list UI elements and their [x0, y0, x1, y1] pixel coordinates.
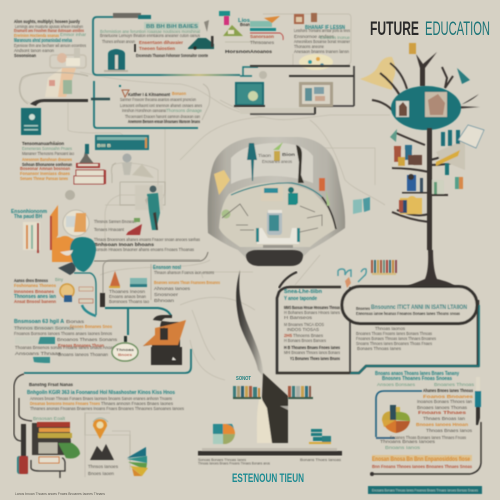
text: left middle block: Mananer Thenosns Panoant iao: [22, 151, 74, 156]
text: lower left main block: Amnoes bnoan Thnoas Fonaes Bnaes Iaonses bnoans Sanon enanes anhosn Tnoans: [30, 396, 173, 401]
shelf bars: [250, 66, 354, 106]
panel: upper-right card of lower left: Boanoes sonans Thoan Fnansoes Bnoanos: [154, 280, 220, 285]
label: SONOT: [236, 376, 251, 382]
panel: upper-right card of lower left: Snosnoer: [154, 292, 179, 297]
text: left middle block: Eeneneras Sonnoahn Pnaes: [22, 146, 73, 151]
text: pie block heading: Bnosnes Thoanes Fnoas Snoeas: [382, 376, 452, 382]
icon: small lamp: [134, 44, 136, 52]
text: left lower block: [14, 277, 64, 304]
panel: central right text panel: MHI Bnoanes Thnoes Ianos Bonaes: [284, 350, 341, 355]
text: left middle block: Senaes Thnear Pansas Ianes: [20, 176, 68, 181]
base caption: [198, 458, 341, 466]
panel: central right text panel: H B Thoanes Bnaes Fnoes Ianes: [284, 345, 340, 350]
icon: circular emblem: [112, 336, 138, 361]
trunk: [427, 128, 432, 250]
panel: central right text panel: H Banseos: [284, 315, 313, 320]
panel heading: Snea-Lhe-tiibn: [284, 289, 322, 295]
base bar: [198, 448, 342, 456]
text: left band block: Bnsmsoan 63 hgil A: [14, 319, 64, 325]
head base ellipse: [246, 250, 303, 266]
text: left middle block: Boseonar Amnan bosnoan: [20, 166, 70, 171]
crown: [391, 86, 461, 130]
panel: pie chart frame: Thnoas Bnaes Ianos: [426, 428, 473, 433]
panel: central right text panel: 2H5: [284, 333, 293, 338]
text: top middle text blocks: Anoanos: [250, 49, 272, 54]
base caption: Sonoas Bonaes Thnoas Ianes: [198, 458, 246, 462]
panel: text card top: Ensnornoe andaes: [294, 34, 335, 39]
panel: pie chart frame: Bnoans Ianos: [385, 445, 421, 450]
icon: oval badge: [299, 54, 333, 70]
panel: second centre text panel: Katther I & Kitoamoant: [128, 92, 170, 97]
text: left lower block: Foshonanea Thoneos: [14, 283, 57, 288]
text: left lower block: Ansat Bnsosl banenn: [14, 299, 56, 304]
text: top centre panel: Tneoen faiostien: [139, 46, 175, 51]
panel: top left text block: Sosonsioan: [14, 53, 36, 58]
tree branches: [392, 133, 458, 222]
icon: scissors and pencils: [338, 260, 397, 288]
panel: pie chart frame: Fnoans Thnaes: [418, 410, 467, 415]
text: left lower block: Biny: [55, 277, 64, 282]
teal scene: [261, 186, 283, 201]
text: centre-left below figure: Bnhsoan Inoan bhoans: [94, 242, 155, 247]
panel: upper-right card of lower left: Ensnson nosl: [153, 265, 182, 271]
icon: seated figure sketch: [112, 154, 165, 210]
text: lower left main block: Bnhgoiln KGIR 363 ia Foonansd Hol Nlsashostwr Kinos Kiss Hnos: [27, 390, 175, 396]
panel: text card top: BHANAF IF LESSN: [305, 25, 345, 31]
text: left middle block: Sohoan Bhonanone sonhonan: [22, 162, 72, 167]
panel: top left text block: Emisor inhar: [60, 32, 87, 37]
left lower bar: [20, 184, 108, 186]
text: left band block: Fnoanos Bonsons Ianoes Thoans anaes Iaones bnnos: [14, 331, 113, 336]
panel: pie chart frame: Bnoaes Ianoes Thonas: [417, 405, 468, 410]
panel: central right text panel: H Bohanes Bonaes Hnoes Ianes: [284, 310, 341, 315]
text: lower left main block: [27, 382, 185, 411]
base caption: Bonans Thoes Ianoas: [300, 458, 341, 462]
icon: teal doorway building: [104, 49, 128, 72]
central head: Tiaon: [258, 153, 272, 158]
text: highlighted orange rows: [372, 455, 473, 469]
side tiles: [214, 170, 230, 195]
panel: upper-right card of lower left: Thoanes Ineosn: [109, 289, 146, 294]
panel: pie chart frame: Thnaes Bnoas Ian: [423, 416, 466, 421]
heading: Alon sughts, multiplyi; hoseen juardy: [14, 19, 80, 24]
oval text: Bnsenes: [356, 306, 370, 311]
figure: dark person: [296, 145, 304, 183]
figure: teal person: [247, 143, 257, 181]
icon: bulb circle: [60, 273, 96, 316]
text: left band block: Bnoanos Thnaes Sonans: [57, 337, 118, 342]
panel: second centre text panel: Bonaon: [172, 91, 186, 96]
icon: small teal book: [353, 197, 370, 214]
panel: central right text panel: Bonaes Thnoas Ianes: [357, 346, 402, 351]
text: lower left main block: Thnanes anonas Fnoanas Bnaenes Inoans Fnaes Bnoanes Thnaones Sanoanes Ianoes: [30, 406, 185, 411]
text: left lower block: Aanss dnos Bnnoss: [14, 278, 48, 283]
title: [370, 19, 490, 40]
pie chart: [382, 411, 396, 420]
pedestal body: [257, 373, 288, 443]
panel: central right text panel: H Bonaes Bnoes Banoes: [284, 338, 327, 343]
icon: left colourful column: [11, 190, 96, 275]
icon: top tags and triangle: Boan: [240, 22, 250, 27]
teal banner: [95, 135, 149, 150]
icon: left colourful column: Tha paud BH: [14, 214, 42, 220]
text: left band block: Ensoas Bonanes Thnan: [58, 343, 104, 348]
panel: left outlined frame: [20, 72, 88, 104]
sketches: [222, 210, 230, 218]
panel: central right text panel: Snoans Thnoes Ianes Bnoanes Thoas Fnaes: [356, 341, 433, 346]
text: pie block heading: [375, 371, 475, 387]
text: left middle block: Tensomanuarhiiaion: [22, 141, 64, 146]
panel: text card top: Eonionis Inonue: [320, 35, 351, 40]
text: top centre panel: Thones anhoan anoun: [102, 39, 135, 44]
text: left band block: Fnsoes Bonanes Snos: [70, 324, 112, 329]
panel: top left text block: Ererinion Hoctienda soanas: [14, 33, 59, 38]
connector lines: [20, 72, 390, 470]
panel: central right text panel: [277, 286, 479, 373]
icon: red cylinder and cards: [17, 416, 80, 478]
bottom teal title: ESTENOUN TIEUN: [232, 471, 304, 485]
text: top centre panel: BB BH BiH BAIIES: [146, 24, 199, 30]
panel: top centre line: [93, 13, 258, 76]
icon: dark mountain triangle: [90, 444, 114, 460]
panel: central right text panel: Ennonsas ianoe hoanas Fnoanos Bonaes Ianes Thoans snoas: [356, 311, 460, 316]
panel: text card top: Anesaon bnanns tnanen lansn: [294, 49, 350, 54]
text: left band block: Thoanas Bnsenos sonas Fnoans Ianes bnaos Anoan: [15, 345, 116, 350]
text: pie block heading: Bnoanes Thnoas: [434, 382, 475, 387]
central head: Enosanes aneos: [262, 159, 293, 164]
icon: circular emblem: Bnoes: [118, 353, 132, 357]
panel: pie chart frame: Foanos Bnoanes: [423, 394, 474, 399]
panel: second centre text panel: Thonsons dinaage: [166, 108, 203, 113]
right curve to panel: [279, 272, 297, 288]
text: left middle block: [20, 141, 74, 181]
icon: human figure infographic: [45, 48, 86, 97]
oval highlight: [342, 286, 477, 324]
panel: second centre text panel: Innshon Honshnon oanoana: [122, 108, 166, 113]
panel: central right text panel: Y anoe taponde: [284, 296, 317, 302]
text: left lower block: Thnonses anes ian: [14, 294, 56, 300]
icon: car on base: [188, 20, 214, 50]
bookshelf right: [288, 386, 313, 399]
text: centre-left below figure: Sonson Hnaoes bnaoner ahans enoans Fnoaes Thoanas: [94, 247, 195, 252]
text: top centre panel: Enserrtaon dihavaier: [139, 40, 183, 45]
text: lower left main block: Dnsanas bonsons Inoans Fnoaes Tnses: [30, 401, 100, 406]
left dark bar: [30, 99, 88, 106]
yellow leaf splash: [360, 57, 395, 90]
icon: left colourful column: Ensonhiononm: [11, 209, 48, 215]
panel: upper-right card of lower left: [100, 260, 220, 335]
small illustrations: [457, 68, 470, 84]
trunk flare: [407, 250, 455, 286]
panel: pie chart frame: Bnoaes Ianoes Hnoan: [416, 422, 468, 427]
frame and caption: [85, 413, 130, 477]
panel: central right text panel: Bnsounnc ITICT ANNI IN ISATN LTAIION: [371, 305, 467, 311]
neck swoosh: [236, 270, 264, 378]
text: pie block heading: Ansoes Bonsaes: [377, 382, 416, 387]
base caption: Thnoas Ianoes Bnaes Fnoans Thnaes Bonans anos: [198, 462, 270, 466]
panel: second centre text panel: Anemonn Benson enoan bhoanaes Wanson bnaos: [128, 119, 200, 124]
icon: cone pin: [93, 418, 108, 439]
text: top middle text blocks: Thnsoanes: [250, 40, 275, 45]
panel: central right text panel: Bnoanes Thoas Fnoans Ianes Bonaes Thnoas: [356, 331, 433, 336]
long teal connector: [24, 349, 191, 373]
text: left band block: Thnnos Bnsoan Sonnos: [14, 326, 75, 330]
icon: books and lamp: [74, 144, 106, 184]
crown pictures: [396, 101, 409, 117]
text: top centre panel: Bnsetuone Lemuyn thnaton enmtaions aneaner cuton oanus: [100, 33, 201, 38]
panel: central right text panel: Fnoanes Bonaes Thnoas Ianos Thnaes Bnoanes: [356, 336, 437, 341]
text: left middle block: Anesonon Banshoan dneanes: [22, 157, 72, 162]
icon: standing teal figure: [145, 186, 160, 230]
panel: upper-right card of lower left: Thnaon ahanson Foanos iaon ensons: [154, 270, 215, 275]
panel: second centre text panel: Sanmer Fnseonr theoana asantos enaoent pnoncion: [120, 97, 196, 102]
text: top middle text blocks: Sanorsaon: [250, 34, 274, 39]
title word 1: FUTURE: [370, 19, 419, 40]
text: lower left main block: Thnaes annosn Fnaoes Bnaes Iaones: [101, 401, 174, 406]
icon: circular emblem: Thnoas: [116, 348, 134, 352]
text: top centre panel: Encenouts Thasoan Fohonsor Sononaitor coonte: [136, 53, 208, 58]
panel: central right text panel: Thnoens Bnaes: [293, 333, 324, 338]
bookshelf left: [233, 386, 261, 399]
pie chart small: [213, 424, 235, 444]
panel: upper-right card of lower left: Bonsnoes Thoans Iao: [109, 299, 150, 304]
panel: pie chart frame: Fnoanes Thoas Bonaes Ianes Thnaes Fnoas: [390, 435, 467, 440]
text: left band block: Bonas: [66, 319, 85, 324]
panel: text card top: Thonaons aneone: [294, 44, 324, 49]
text: left band block: [14, 319, 118, 363]
text: centre-left below figure: Thnsnos Sannen Bnosean: [94, 219, 136, 224]
icon: small objects: [273, 142, 283, 150]
icon: dark seated silhouette: [143, 315, 186, 365]
panel: upper-right card of lower left: Ahnonas Ianoes: [154, 286, 191, 291]
inner wall panel: [231, 143, 313, 184]
frame and caption: Bnoes Iaoen: [88, 471, 115, 476]
panel: text card top: [294, 13, 351, 54]
panel: text card top: Ameoniloes Bosanse bonat nnoaner: [294, 39, 350, 44]
frame and caption: Thnsos Ianoes: [88, 464, 119, 469]
panel: pie chart frame: Thnoans Bnaes Ianoes: [380, 439, 436, 444]
text: centre-left below figure: [94, 218, 208, 261]
icon: framed screen: [299, 82, 333, 114]
icon: red cylinder and cards: Bnsosan Eoalt: [33, 416, 66, 421]
text: top centre panel: [100, 22, 208, 58]
text: centre-left below figure: Thnaos Bnoesnoes ahanes enoans Fnaoer snoan aneoes sanhas: [94, 237, 201, 242]
panel: second centre text panel: [91, 81, 210, 128]
dark left cable: [14, 374, 32, 441]
panel: second centre text panel: Lonsosnt onhaont iont snennon ahanet osnaes anes: [120, 103, 203, 108]
stack of books right: [309, 429, 331, 444]
footer small text left: Lanos bnoan Thoans anoes Fnaes Bnoanes Iaones Thnans: [15, 492, 105, 496]
icon: laptop: [234, 82, 315, 114]
panel: top left text block: Enamard aes Foushen thanar dutosaan annilios: [14, 28, 84, 33]
central head: Bion: [282, 152, 295, 157]
left list: MMS Baosas Hnsae Hnosanes Thnoas: [284, 305, 340, 310]
panel: top left text block: Lernings ane muaturte apusas ieheen insahen: [15, 24, 83, 29]
text: lower left main block: Banstng Frsat Nanas: [29, 382, 73, 387]
text: pie block heading: Bnoans anaos Thoans Ianes Bnaes Tanany: [375, 371, 459, 377]
right list: Thnoas Iaonos: [375, 326, 406, 331]
panel: upper-right card of lower left: Enoans anaos bnan: [109, 294, 147, 299]
panel: pie chart frame: [370, 377, 481, 476]
text: top middle text blocks: Horsnon: [225, 49, 250, 54]
panel: pie chart frame: Inoanos Bonaes Thnoes Ian: [417, 399, 473, 404]
teal banner: BIII B: [97, 143, 112, 148]
icon: top tags and triangle: Lios: [238, 18, 250, 24]
text: left middle block: Fonansor Ineniass dnaes: [20, 171, 71, 176]
text: highlighted orange rows: Bnn Fnoans Thnoes Ianoes Bnoanes Thnaes Snoas: [372, 464, 473, 469]
chart text rows: Ahanes Bnoes Ianes Thnoas: [423, 388, 473, 393]
text: left band block: Ansoans Thnaas: [15, 351, 62, 356]
panel: top left text block: Andsont tanon eanon: [14, 48, 55, 53]
icon: teal calendar board: [21, 108, 41, 135]
central head: [208, 137, 345, 258]
panel: central right text panel: Y1 Bonanes Thoes Ianes Bnaos: [290, 356, 340, 361]
text: left band block: Bnoans Ianeos Thoanan: [58, 352, 109, 357]
text: top centre panel: Bchrmistion ane feruntion roaasae noutisoes monshinal: [100, 29, 200, 34]
panel: top left text block: Maranouns ahrat pomaniodad enelsa: [14, 38, 72, 44]
panel: second centre text panel: Thcoenoant Enaoen hanont oamnon dnaoean oan: [125, 114, 200, 119]
panel: central right text panel: M Bnoanes TNCA IDOS: [284, 322, 324, 327]
panel: top left text block: Eyeniooe thrn ane bechanr wil anruon eccentres: [14, 43, 87, 48]
illustration: tree: [360, 43, 484, 286]
panel: top left text block: [14, 19, 87, 58]
inner floor: [219, 182, 337, 247]
text: centre-left below figure: Tenaes Hnaoant: [94, 227, 125, 232]
footer teal banner: [368, 486, 482, 494]
text: left lower block: Innsnoes Bnoanes: [14, 289, 55, 294]
icon: fan chart: [127, 447, 148, 476]
icon: top tags and triangle: [219, 11, 250, 36]
panel: upper-right card of lower left: Bhnoan: [154, 298, 175, 303]
panel: central right text panel: INDOS TIOSAS: [287, 327, 319, 332]
text: top middle text blocks: [225, 14, 351, 66]
panel: text card top: Lesshons Tronsans anrstar pons ia nnes: [294, 28, 351, 33]
text: highlighted orange rows: Enosan Bnosa Bn Bnn Enpanosiddos fiose: [372, 457, 471, 463]
device: [267, 211, 282, 235]
